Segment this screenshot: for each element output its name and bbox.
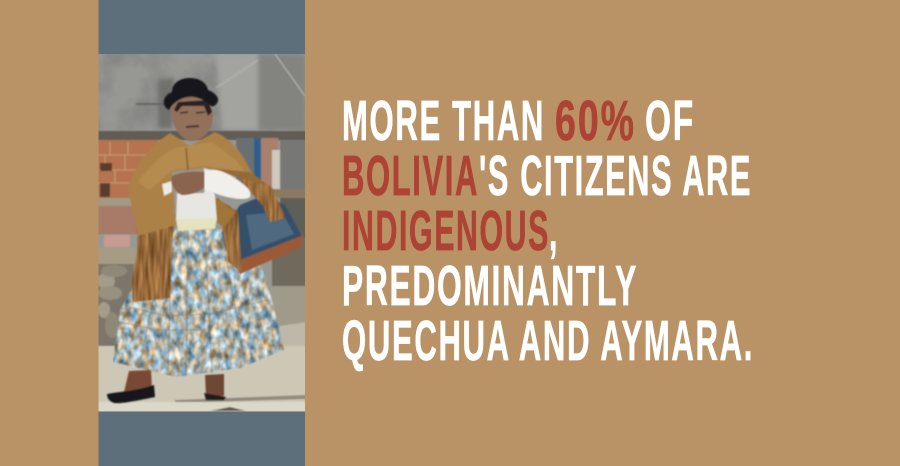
hands [172, 172, 204, 195]
line 3: indigenous,: , [549, 199, 559, 263]
line 2: Bolivia's citizens are [342, 144, 752, 208]
line 3: indigenous,: INDIGENOUS [342, 199, 550, 263]
headline text [342, 89, 754, 373]
photo: Bolivian woman in traditional dress [97, 54, 306, 412]
skirt [113, 229, 284, 377]
handbag [222, 196, 304, 274]
line 1: More than 60% of: OF [645, 89, 695, 153]
photo background: wall, bricks, rocks and ground [97, 54, 306, 412]
panel: slate side column [98, 0, 305, 466]
blouse and sleeve [162, 168, 250, 231]
line 1: More than 60% of: MORE THAN [342, 89, 545, 153]
poncho with fringe [128, 132, 286, 302]
head and hat [164, 78, 218, 141]
line 3: indigenous, [342, 199, 559, 263]
line 2: Bolivia's citizens are: BOLIVIA [342, 144, 479, 208]
legs and shoes [107, 370, 226, 403]
line 1: More than 60% of: 60% [555, 89, 636, 153]
line 4: predominantly: PREDOMINANTLY [342, 254, 638, 318]
